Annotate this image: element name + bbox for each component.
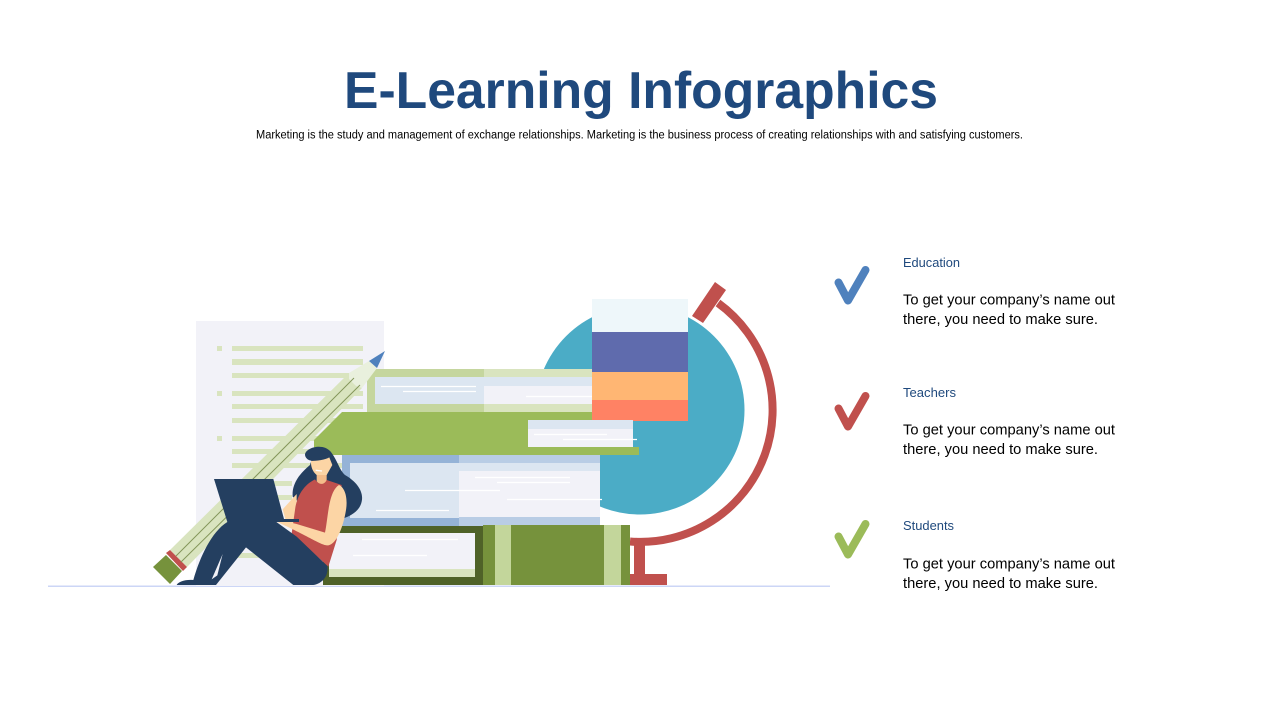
body text: To get your company’s name out [903,292,1115,308]
book: second, green [314,412,639,455]
subtitle: Marketing is the study and management of exchange relationships. Marketing is the business process of creating relationships with and satisfying customers. [256,130,1023,142]
mouth [316,468,322,473]
book: third, blue [342,455,602,526]
list item: Teachers [838,386,1115,458]
icon: red check [838,396,866,426]
icon: green check [838,524,866,554]
heading: Education: Education [903,256,960,270]
shirt [292,479,342,567]
heading: Students: Students [903,519,954,533]
ground line [48,586,830,587]
list item: Education [838,256,1115,328]
gap between legs [212,554,223,579]
left arm [283,494,297,524]
icon: blue check [838,270,866,300]
book: bottom, dark green [323,525,630,585]
title: E-Learning Infographics [344,62,938,120]
body text: there, you need to make sure. [903,442,1098,458]
legs [177,521,328,585]
hair [293,447,362,518]
person with laptop [177,447,362,585]
pencil [153,351,385,584]
globe [536,282,773,585]
laptop [214,479,299,522]
book: top [367,369,592,412]
neck [317,473,327,485]
paper document [196,321,384,586]
body text: To get your company’s name out [903,556,1115,572]
body text: there, you need to make sure. [903,576,1098,592]
body text: To get your company’s name out [903,422,1115,438]
illustration: e-learning scene [48,282,830,587]
right arm [275,485,347,545]
body text: there, you need to make sure. [903,312,1098,328]
heading: Teachers: Teachers [903,386,956,400]
list item: Students [838,519,1115,592]
face [311,457,332,475]
